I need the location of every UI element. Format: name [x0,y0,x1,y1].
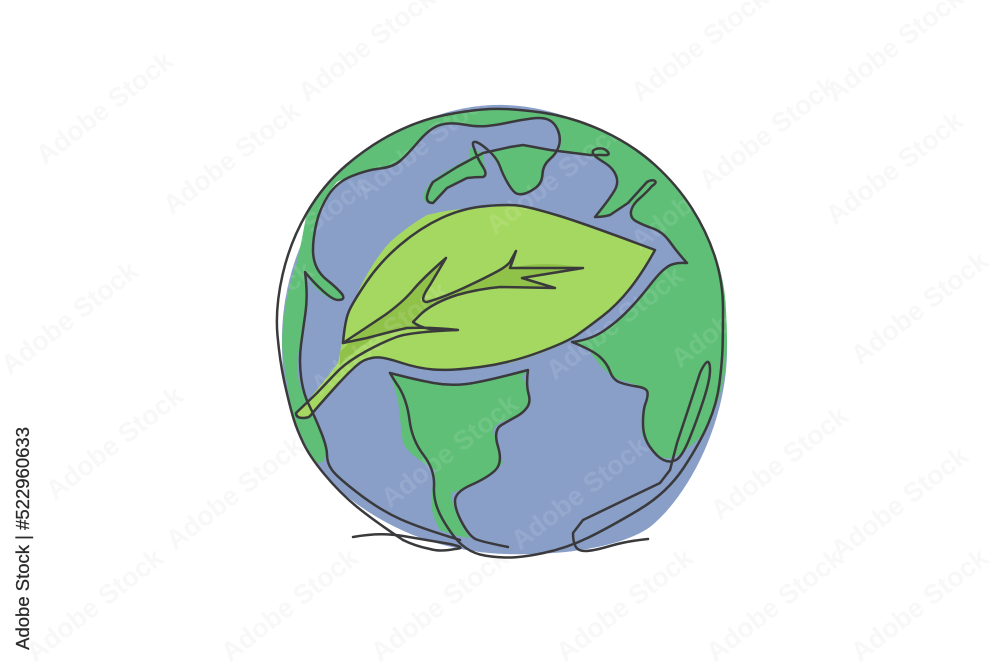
watermark on white background: Adobe Stock [157,95,306,221]
continuous outline drawing [277,109,723,558]
watermark over globe: Adobe Stock [665,248,814,374]
watermark over globe: Adobe Stock [170,255,319,381]
land: central continent [490,145,557,195]
watermark over globe: Adobe Stock [305,275,454,401]
outline: bottom squiggle [353,534,460,550]
watermark on white background: Adobe Stock [160,430,309,556]
watermark on white background: Adobe Stock [845,245,994,371]
leaf fill [296,206,655,417]
land: rim and eastern continent [282,109,727,463]
watermark on white background: Adobe Stock [845,542,994,667]
watermark on white background: Adobe Stock [825,440,974,566]
land: southern continent [390,370,531,538]
watermark on white background: Adobe Stock [20,542,169,667]
watermark over globe: Adobe Stock [350,80,499,206]
leaf vein shading [340,251,583,365]
watermark on white background: Adobe Stock [550,542,699,667]
watermark on white background: Adobe Stock [215,542,364,667]
outline: leaf edge and stem [296,205,655,418]
outline: leaf veins [343,251,583,343]
ocean fill [282,105,727,554]
watermark on white background: Adobe Stock [693,70,842,196]
watermark over globe: Adobe Stock [225,170,374,296]
outline: southern continent coast [390,370,529,547]
outline: globe edge [277,109,723,558]
watermark on white background: Adobe Stock [365,542,514,667]
watermark on white background: Adobe Stock [820,105,969,231]
watermark on white background: Adobe Stock [705,400,854,526]
watermark on white background: Adobe Stock [40,380,189,506]
outline: inner rim and northern coast [300,118,710,551]
watermark on white background: Adobe Stock [30,45,179,171]
watermark over globe [170,80,814,556]
credit text: Adobe Stock | #522960633 [12,427,33,650]
watermark over globe: Adobe Stock [480,115,629,241]
watermark over globe: Adobe Stock [505,430,654,556]
watermark on white background: Adobe Stock [700,542,849,667]
land: northern strip [423,148,485,203]
watermark over globe: Adobe Stock [540,260,689,386]
watermark over globe: Adobe Stock [375,388,524,514]
watermark over globe: Adobe Stock [625,130,774,256]
